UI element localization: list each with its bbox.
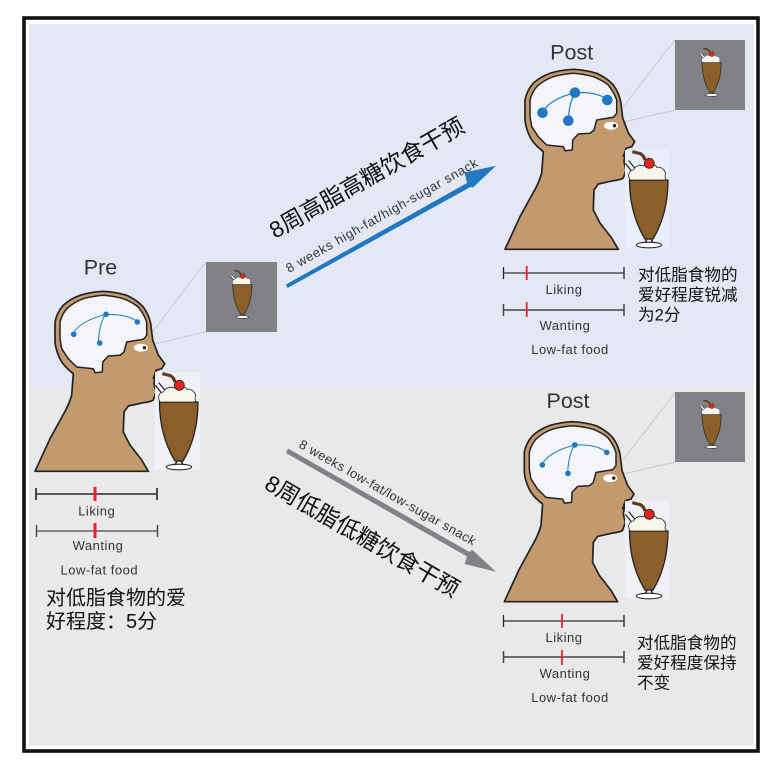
icon: milkshake pre xyxy=(155,372,200,470)
group: post high-fat xyxy=(503,40,745,357)
icon: milkshake post bottom xyxy=(625,501,669,599)
head with brain: post bottom xyxy=(504,422,634,602)
rating scale: liking post bottom xyxy=(503,614,624,645)
rating scale: wanting post bottom xyxy=(503,650,624,681)
rating scale: liking post top xyxy=(503,266,624,297)
rating scale: wanting post top xyxy=(503,302,624,333)
group: post low-fat xyxy=(503,389,745,705)
leader lines: post top xyxy=(623,40,675,122)
leader lines: post bottom xyxy=(623,393,675,474)
arrow: low-fat xyxy=(286,448,496,572)
rating scale: liking pre xyxy=(36,487,157,518)
inset: food cue post top xyxy=(675,40,745,110)
panel: high-fat intervention background xyxy=(29,24,754,387)
inset: food cue pre xyxy=(206,262,277,332)
text: post top result: 爱好程度锐减 xyxy=(638,286,738,304)
heading: Post top: Post xyxy=(550,40,593,64)
label: chinese high-fat: 8周高脂高糖饮食干预 xyxy=(265,112,469,243)
rating scale: wanting post top: Wanting xyxy=(540,318,590,333)
head with brain: pre xyxy=(35,291,165,471)
label: low-fat food post bottom: Low-fat food xyxy=(531,690,609,705)
label: low-fat food pre: Low-fat food xyxy=(61,562,138,578)
group: pre state xyxy=(35,256,277,633)
rating scale: wanting post bottom: Wanting xyxy=(540,666,590,681)
heading: Pre: Pre xyxy=(84,256,117,280)
group: low-fat arm xyxy=(260,437,496,602)
leader lines: pre xyxy=(153,262,206,344)
rating scale: liking post bottom: Liking xyxy=(546,630,582,645)
rating scale: wanting pre: Wanting xyxy=(73,538,123,553)
inset: food cue post bottom xyxy=(675,392,745,462)
icon: milkshake post top xyxy=(625,150,669,248)
text: post top result: 对低脂食物的 xyxy=(638,266,738,284)
label: low-fat food post top: Low-fat food xyxy=(531,342,609,357)
rating scale: liking pre: Liking xyxy=(78,504,115,518)
label: english low-fat: 8 weeks low-fat/low-sugar snack xyxy=(297,437,479,549)
panel: low-fat intervention background xyxy=(29,387,754,746)
text: pre score: 对低脂食物的爱 xyxy=(46,586,186,610)
text: post top result: 为2分 xyxy=(638,306,680,324)
label: english high-fat: 8 weeks high-fat/high-sugar snack xyxy=(283,155,481,276)
rating scale: wanting pre xyxy=(36,523,158,553)
text: post bottom result: 爱好程度保持 xyxy=(637,654,737,672)
label: chinese low-fat: 8周低脂低糖饮食干预 xyxy=(260,470,464,602)
text: post bottom result: 不变 xyxy=(637,674,670,692)
head with brain: post top xyxy=(505,69,635,249)
group: high-fat arm xyxy=(265,112,496,288)
heading: Post bottom: Post xyxy=(546,389,590,413)
arrow: high-fat xyxy=(286,166,496,288)
text: pre score: 好程度：5分 xyxy=(46,610,157,633)
text: post bottom result: 对低脂食物的 xyxy=(637,634,737,652)
rating scale: liking post top: Liking xyxy=(546,282,582,297)
